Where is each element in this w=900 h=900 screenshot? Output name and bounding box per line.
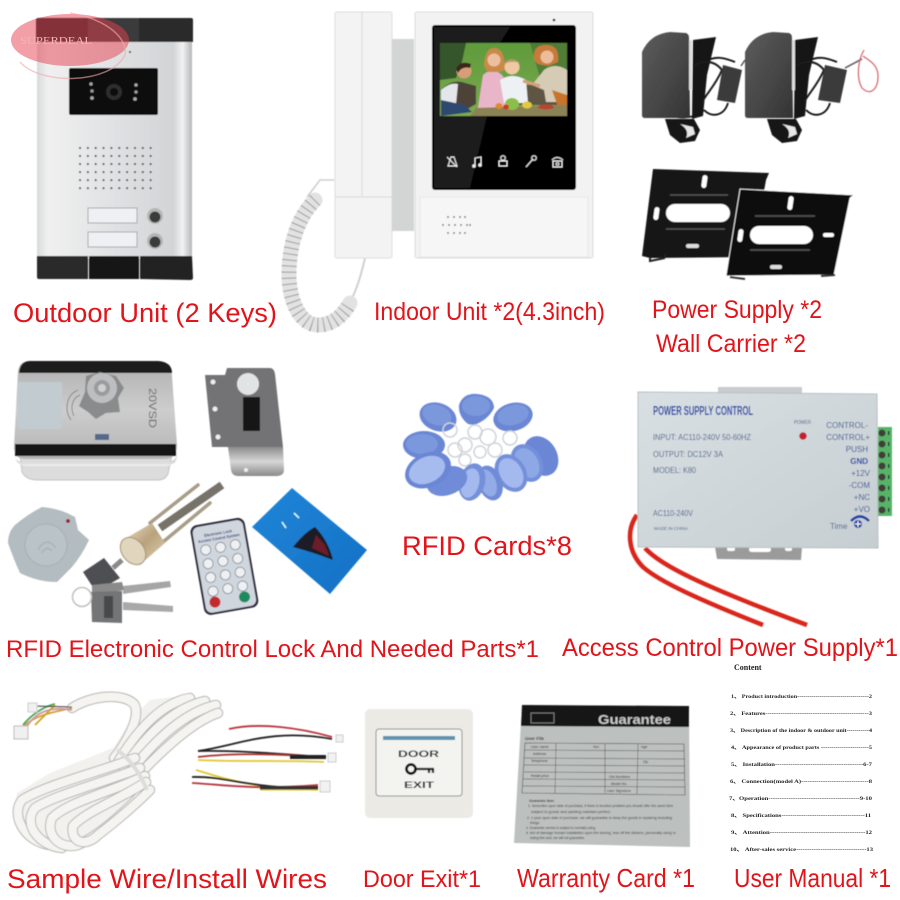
remote control: Electronic Lock xyxy=(204,529,233,538)
lock lower black band xyxy=(15,444,176,456)
guarantee terms: 4. Act of damage human installation upon the tearing, tear off the stickers, personally using or xyxy=(526,831,677,835)
contents list: 10、 After-sales service--------------------------------13 xyxy=(730,847,873,853)
card header xyxy=(521,705,689,727)
key rings xyxy=(443,423,517,466)
form table xyxy=(522,743,685,795)
manual heading: Content xyxy=(734,663,762,672)
guarantee terms: things. xyxy=(530,821,540,825)
contents list: 2、 Features------------------------------------------------3 xyxy=(730,711,872,717)
name plate 1 xyxy=(88,208,137,223)
name plate 2 xyxy=(88,232,137,247)
contents list: 3、 Description of the indoor & outdoor unit-----------4 xyxy=(730,728,872,734)
panel: warranty card xyxy=(514,705,690,847)
door text: DOOR xyxy=(398,749,439,760)
guarantee terms: 1. Seven/ten upon date of purchase, if there is function problem you should offer the same item xyxy=(528,804,673,808)
RFID reader puck xyxy=(8,507,89,582)
guarantee title: Guarantee xyxy=(598,712,671,727)
form table: Sex xyxy=(593,745,599,749)
access card xyxy=(252,488,367,594)
label: lock and parts: RFID Electronic Control Lock And Needed Parts*1 xyxy=(6,636,539,663)
adapter 1 xyxy=(642,32,745,143)
guarantee terms: losing this card, we will not guarantee. xyxy=(530,836,585,840)
user file heading: User File xyxy=(525,736,545,741)
contents list: 6、 Connection(model A)-------------------------------8 xyxy=(730,778,872,785)
green terminal block xyxy=(878,427,892,516)
lock body xyxy=(14,361,177,459)
label: wires: Sample Wire/Install Wires xyxy=(7,864,327,894)
panel: RFID key fobs xyxy=(399,394,565,504)
form table: Zip xyxy=(643,760,648,764)
RFID reader pad xyxy=(18,382,62,429)
wall plate xyxy=(365,709,473,818)
bottom mounting tab xyxy=(715,547,802,560)
contents list: 9、 Attention-------------------------------------------12 xyxy=(731,830,872,836)
lock lower casing xyxy=(20,455,172,480)
label: RFID cards: RFID Cards*8 xyxy=(402,531,572,561)
form table: User name xyxy=(531,745,549,749)
remote control xyxy=(189,517,259,616)
guarantee terms: 3. Guarantee service is subject to normally using. xyxy=(526,826,596,830)
fobs right stack xyxy=(488,430,565,498)
wires by the knob xyxy=(67,390,80,420)
form table: Age xyxy=(641,745,647,749)
panel: indoor unit xyxy=(289,12,593,325)
power indicator xyxy=(794,420,811,440)
wall carrier 1 xyxy=(642,169,769,261)
handset xyxy=(335,12,392,258)
microphone hole xyxy=(129,51,131,53)
cable connector xyxy=(14,726,28,739)
contents list: 8、 Specifications--------------------------------------11 xyxy=(731,813,871,819)
icon: monitor xyxy=(499,156,507,166)
outdoor unit top cap xyxy=(36,18,193,42)
origin note: MADE IN CHINA xyxy=(654,526,688,531)
keys xyxy=(72,558,173,623)
family photo xyxy=(440,43,567,116)
panel: user manual xyxy=(729,663,873,853)
contents list: 1、 Product introduction-----------------------------------2 xyxy=(731,694,872,700)
exit text: EXIT xyxy=(404,780,435,790)
terminal labels: +VO xyxy=(854,505,870,514)
controller heading: POWER SUPPLY CONTROL xyxy=(653,404,753,418)
fob front xyxy=(399,444,457,496)
monitor body xyxy=(415,12,593,258)
coiled white cable xyxy=(13,697,220,848)
screen gloss xyxy=(434,27,510,188)
lock knob xyxy=(79,372,124,419)
screen xyxy=(432,25,576,190)
harness connector 3 xyxy=(320,781,330,792)
time adjuster: Time xyxy=(830,522,848,531)
speaker grille xyxy=(78,146,152,190)
adapter 2 xyxy=(745,32,878,143)
form table: Address xyxy=(533,752,546,756)
fob top right xyxy=(490,398,536,436)
guarantee terms: 2. 1 year upon date of purchase, we will guarantee to keep the goods in repairing including xyxy=(527,816,672,820)
card logo xyxy=(531,713,554,723)
lock brand mark: 20VSD xyxy=(146,388,158,428)
touch icons xyxy=(447,156,563,167)
spec output: OUTPUT: DC12V 3A xyxy=(653,450,724,459)
wall bracket xyxy=(392,39,414,231)
form table: Telephone xyxy=(531,759,548,763)
terminal labels xyxy=(826,421,871,514)
card sheet xyxy=(514,705,690,847)
watermark xyxy=(11,13,129,78)
guarantee terms xyxy=(526,799,677,840)
outdoor unit silver body xyxy=(37,40,192,258)
lock small badge xyxy=(95,434,109,440)
controller housing xyxy=(638,392,878,548)
camera panel xyxy=(69,68,158,115)
coiled handset cord xyxy=(289,180,365,325)
icon: mute xyxy=(447,157,457,167)
label: outdoor unit: Outdoor Unit (2 Keys) xyxy=(13,298,277,328)
terminal labels: -COM xyxy=(849,481,870,490)
icon: phone xyxy=(552,158,563,167)
strike plate xyxy=(205,368,284,476)
call button 1 xyxy=(147,208,163,224)
outdoor unit bottom cap xyxy=(37,256,193,280)
short harnesses xyxy=(192,726,332,790)
cable connector second xyxy=(28,703,37,712)
spec model: MODEL: K80 xyxy=(653,466,696,475)
speaker panel xyxy=(420,197,588,257)
guarantee terms: subject to goods and packing maintain perfect. xyxy=(531,810,611,814)
form table: User Signature xyxy=(607,789,631,793)
harness connector 2 xyxy=(328,753,336,762)
top mounting tab xyxy=(718,387,802,394)
panel: electric lock xyxy=(8,361,367,623)
lock top black band xyxy=(19,361,172,373)
indicator bar xyxy=(383,736,455,740)
wall carrier 2 xyxy=(726,189,854,279)
time adjuster xyxy=(830,516,869,531)
panel: access control power supply xyxy=(630,387,892,625)
voltage note: AC110-240V xyxy=(653,509,694,518)
terminal labels: +NC xyxy=(854,493,870,502)
speaker holes xyxy=(442,216,471,234)
terminal labels: GND xyxy=(850,457,868,466)
label: power supply: Power Supply *2 xyxy=(652,296,822,324)
status dot xyxy=(553,19,555,21)
harness connector 1 xyxy=(336,735,343,742)
label: door exit: Door Exit*1 xyxy=(363,866,481,893)
icon: music xyxy=(473,157,481,167)
red power wires xyxy=(630,515,807,625)
push button xyxy=(376,729,462,796)
panel: power adapters xyxy=(642,32,878,143)
label: wall carrier: Wall Carrier *2 xyxy=(656,330,806,358)
power indicator: POWER xyxy=(794,420,811,426)
terminal labels: +12V xyxy=(851,469,871,478)
cable connector tails xyxy=(23,704,72,728)
terminal labels: PUSH xyxy=(846,445,868,454)
lock chrome trim xyxy=(15,452,177,466)
terminal labels: CONTROL+ xyxy=(826,433,870,442)
contents list xyxy=(729,694,873,853)
fob top left xyxy=(415,397,461,437)
icon: unlock key xyxy=(526,156,536,167)
terminal labels: CONTROL- xyxy=(826,421,868,430)
fob top middle xyxy=(459,394,494,425)
fobs bottom row xyxy=(422,460,507,504)
lock cylinder and rods xyxy=(113,485,222,570)
form table: Old Numbers xyxy=(609,775,630,779)
guarantee terms: Guarantee Item: xyxy=(529,799,555,803)
form table: Retail price xyxy=(531,774,549,778)
contents list: 5、 Installation----------------------------------------6-7 xyxy=(731,762,872,768)
panel: door exit button xyxy=(365,709,473,818)
remote control: Access Control System xyxy=(198,533,241,544)
contents list: 7、Operation-----------------------------------------9-10 xyxy=(729,796,872,802)
form table: Model No. xyxy=(611,782,627,786)
icon: key xyxy=(406,764,434,774)
label: warranty card: Warranty Card *1 xyxy=(517,863,695,893)
label: indoor unit: Indoor Unit *2(4.3inch) xyxy=(374,298,605,326)
panel: wall carriers xyxy=(642,169,854,279)
panel: cable coil xyxy=(13,697,343,848)
fob left xyxy=(403,431,445,459)
spec input: INPUT: AC110-240V 50-60HZ xyxy=(653,433,751,442)
contents list: 4、 Appearance of product parts -----------------------5 xyxy=(731,745,872,751)
watermark: SUPERDEAL xyxy=(20,35,92,47)
panel: outdoor unit xyxy=(36,18,193,280)
call button 2 xyxy=(147,233,163,249)
